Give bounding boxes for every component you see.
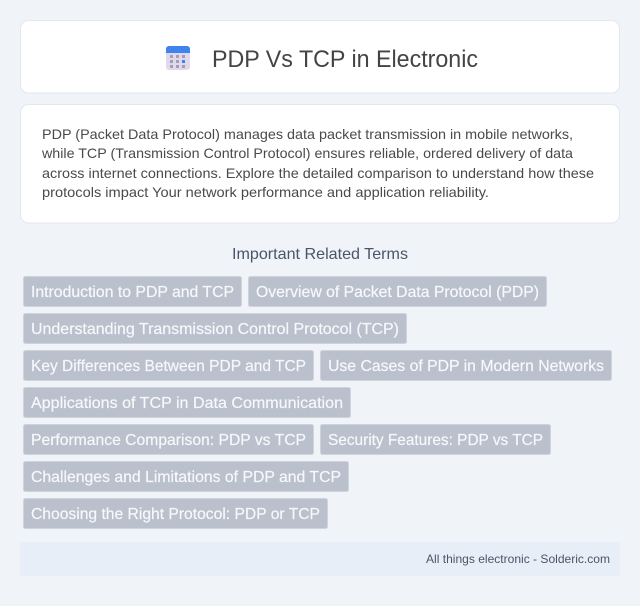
tag	[24, 388, 350, 418]
text block: description: across internet connections. Explore the detailed comparison to understand how these	[42, 165, 594, 181]
panel: intro text	[20, 104, 620, 223]
tag	[320, 424, 550, 454]
tag	[24, 314, 406, 344]
icon: calendar	[166, 46, 190, 70]
tag	[248, 276, 546, 306]
heading: related terms: Important Related Terms	[232, 246, 408, 263]
tag	[320, 350, 612, 380]
tag: Choosing the Right Protocol: PDP or TCP	[31, 506, 320, 523]
tag: Understanding Transmission Control Protocol (TCP)	[31, 321, 399, 338]
text block: description: PDP (Packet Data Protocol) manages data packet transmission in mobile networks,	[42, 126, 573, 142]
tag: Introduction to PDP and TCP	[31, 284, 234, 301]
tag: Key Differences Between PDP and TCP	[31, 358, 306, 375]
panel: title header	[20, 20, 620, 93]
footer: All things electronic - Solderic.com	[426, 552, 610, 566]
tag	[24, 276, 242, 306]
tag	[24, 498, 328, 528]
tag: Applications of TCP in Data Communication	[31, 395, 343, 412]
tag: Overview of Packet Data Protocol (PDP)	[256, 284, 539, 301]
tag: Use Cases of PDP in Modern Networks	[328, 358, 604, 375]
tag	[24, 350, 314, 380]
tag: Performance Comparison: PDP vs TCP	[31, 432, 306, 449]
tag: Challenges and Limitations of PDP and TCP	[31, 469, 341, 486]
footer	[20, 542, 620, 576]
text block: description: while TCP (Transmission Control Protocol) ensures reliable, ordered delivery of data	[41, 145, 573, 161]
text block: description: protocols impact Your network performance and application reliability.	[42, 184, 489, 200]
title: PDP Vs TCP in Electronic	[212, 46, 478, 73]
tag list	[24, 276, 612, 528]
tag	[24, 462, 348, 492]
tag	[24, 424, 314, 454]
tag: Security Features: PDP vs TCP	[328, 432, 543, 449]
text block: description	[41, 126, 594, 200]
